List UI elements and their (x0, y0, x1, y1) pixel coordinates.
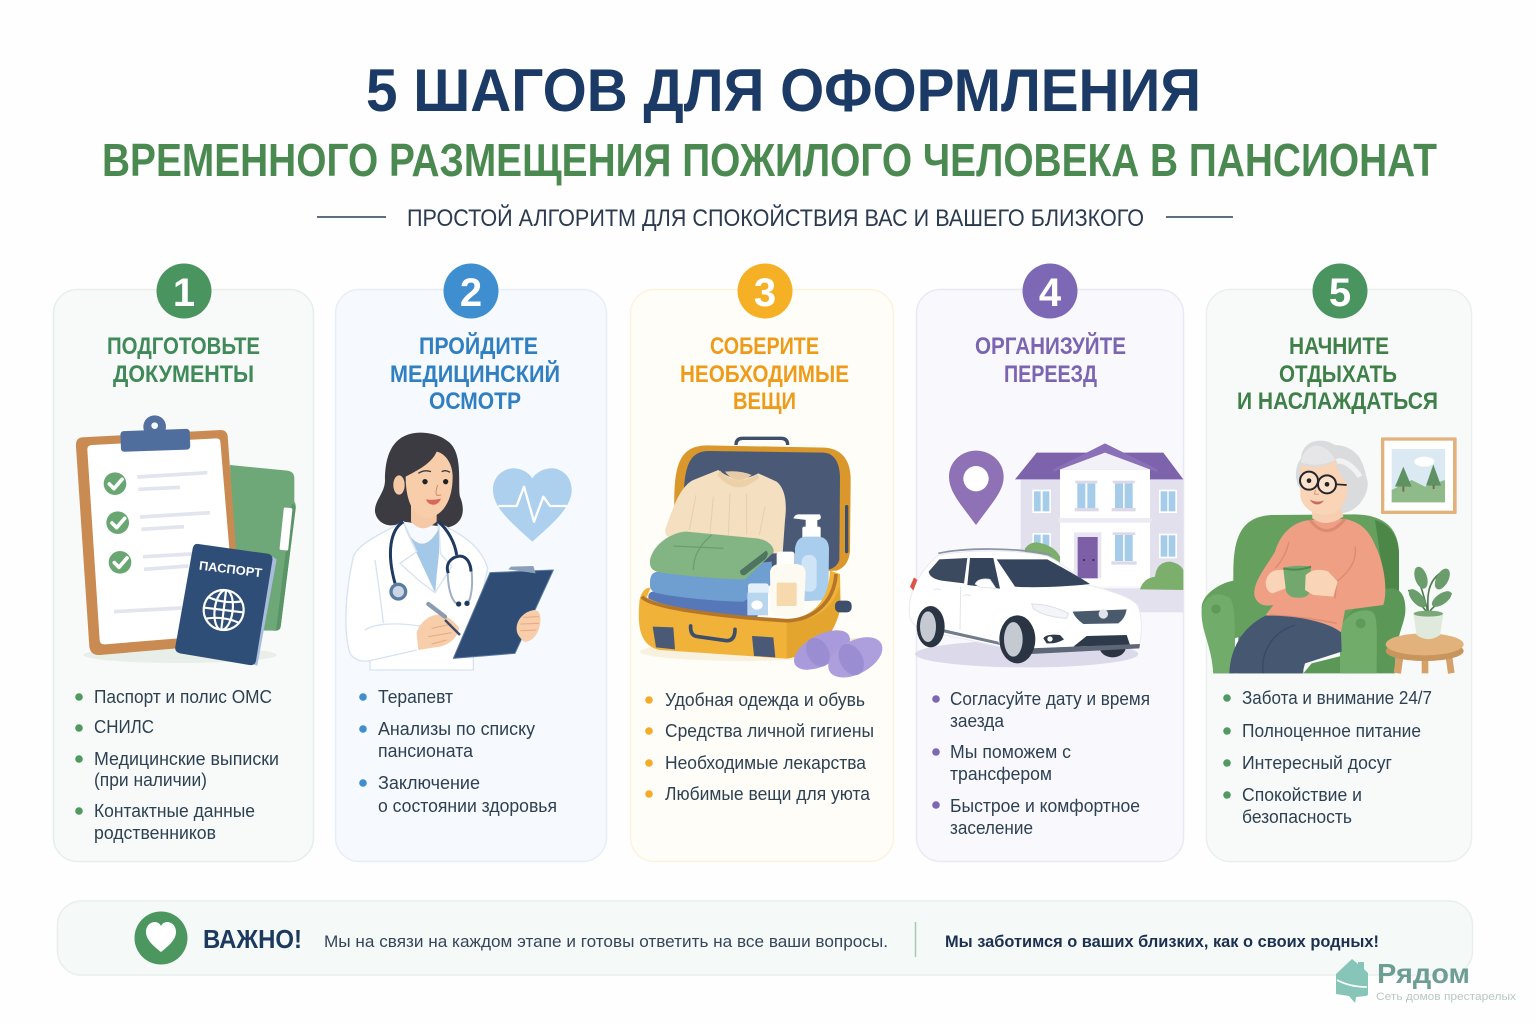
logo: Рядом: Сеть домов престарелых (1376, 991, 1517, 1003)
title: 5 ШАГОВ ДЛЯ ОФОРМЛЕНИЯ (366, 57, 1201, 124)
panel: step 4 moving (909, 264, 1184, 862)
step 2 list: о состоянии здоровья (378, 796, 557, 816)
icon: car, house and location pin (909, 443, 1183, 667)
panel: step 5 relax (1202, 264, 1472, 862)
step 4 list (932, 689, 1150, 838)
step 3 heading: НЕОБХОДИМЫЕ (680, 361, 849, 388)
step 2 list: Анализы по списку (378, 719, 535, 739)
step 2 list: Терапевт (378, 687, 453, 707)
step 1 list: Медицинские выписки (94, 749, 279, 769)
step 1 heading: ПОДГОТОВЬТЕ (107, 333, 260, 360)
step 5 list: Интересный досуг (1242, 753, 1392, 773)
icon: doctor with clipboard (346, 433, 572, 670)
step 5 list: Спокойствие и (1242, 785, 1362, 805)
step 1 heading: ДОКУМЕНТЫ (113, 361, 254, 388)
callout text: Мы на связи на каждом этапе и готовы ответить на все ваши вопросы. (324, 932, 888, 951)
logo: Рядом (1336, 958, 1517, 1003)
step 4 heading (975, 332, 1126, 388)
step 2 list: Заключение (378, 773, 480, 793)
step 4 list: заселение (950, 818, 1033, 838)
step 2 number badge: 2 (460, 271, 482, 315)
icon: clipboard, folder and passport (76, 415, 296, 666)
step 4 list: Мы поможем с (950, 742, 1071, 762)
step 3 list: Любимые вещи для уюта (665, 784, 871, 804)
step 3 heading (680, 333, 849, 415)
step 2 heading: ПРОЙДИТЕ (419, 332, 538, 360)
logo: Рядом: Рядом (1377, 958, 1470, 989)
step 1 list: Контактные данные (94, 801, 255, 821)
step 3 list: Средства личной гигиены (665, 721, 874, 741)
step 3 list (645, 690, 874, 804)
step 3 heading: СОБЕРИТЕ (710, 333, 819, 360)
step 1 heading (107, 333, 260, 388)
step 5 list (1223, 688, 1432, 827)
step 1 list (75, 687, 279, 843)
icon: heart (134, 912, 188, 964)
step 4 list: трансфером (950, 764, 1052, 784)
step 4 number badge (1022, 264, 1078, 318)
step 1 list: (при наличии) (94, 770, 207, 790)
step 3 heading: ВЕЩИ (733, 388, 796, 415)
step 1 list: Паспорт и полис ОМС (94, 687, 272, 707)
step 2 list (359, 687, 557, 816)
callout closing statement: Мы заботимся о ваших близких, как о своих родных! (945, 932, 1379, 951)
panel: step 2 medical exam (336, 264, 606, 862)
step 3 list: Удобная одежда и обувь (665, 690, 865, 710)
step 3 number badge (738, 264, 792, 318)
step 2 number badge (444, 264, 498, 318)
step 4 heading: ОРГАНИЗУЙТЕ (975, 332, 1126, 360)
panel: step 3 belongings (630, 264, 894, 862)
step 4 list: заезда (950, 711, 1005, 731)
step 5 number badge: 5 (1329, 271, 1351, 315)
step 4 list: Согласуйте дату и время (950, 689, 1150, 709)
callout heading: ВАЖНО! (203, 924, 302, 954)
step 5 heading (1237, 333, 1438, 415)
step 5 heading: НАЧНИТЕ (1289, 333, 1389, 360)
icon: elderly woman in armchair (1202, 437, 1464, 674)
step 3 list: Необходимые лекарства (665, 753, 867, 773)
step 4 list: Быстрое и комфортное (950, 796, 1140, 816)
step 5 list: безопасность (1242, 807, 1352, 827)
tagline: ПРОСТОЙ АЛГОРИТМ ДЛЯ СПОКОЙСТВИЯ ВАС И ВАШЕГО БЛИЗКОГО (407, 204, 1144, 232)
panel: step 1 documents (54, 264, 314, 862)
step 4 number badge: 4 (1039, 271, 1062, 315)
step 2 heading: ОСМОТР (429, 388, 521, 415)
icon: open suitcase with clothes (639, 438, 889, 686)
step 4 heading: ПЕРЕЕЗД (1004, 361, 1097, 388)
step 5 list: Полноценное питание (1242, 721, 1421, 741)
icon: clipboard, folder and passport: ПАСПОРТ (198, 559, 263, 580)
step 1 number badge (156, 264, 212, 318)
step 5 number badge (1312, 264, 1368, 318)
step 1 list: СНИЛС (94, 717, 154, 737)
step 2 heading: МЕДИЦИНСКИЙ (390, 360, 560, 388)
step 1 number badge: 1 (173, 271, 195, 315)
step 5 list: Забота и внимание 24/7 (1242, 688, 1432, 708)
step 5 heading: И НАСЛАЖДАТЬСЯ (1237, 388, 1438, 415)
step 2 heading (390, 332, 560, 415)
step 3 number badge: 3 (754, 271, 776, 315)
step 5 heading: ОТДЫХАТЬ (1279, 361, 1397, 388)
step 2 list: пансионата (378, 741, 474, 761)
callout: important note bar (58, 901, 1472, 975)
step 1 list: родственников (94, 823, 216, 843)
